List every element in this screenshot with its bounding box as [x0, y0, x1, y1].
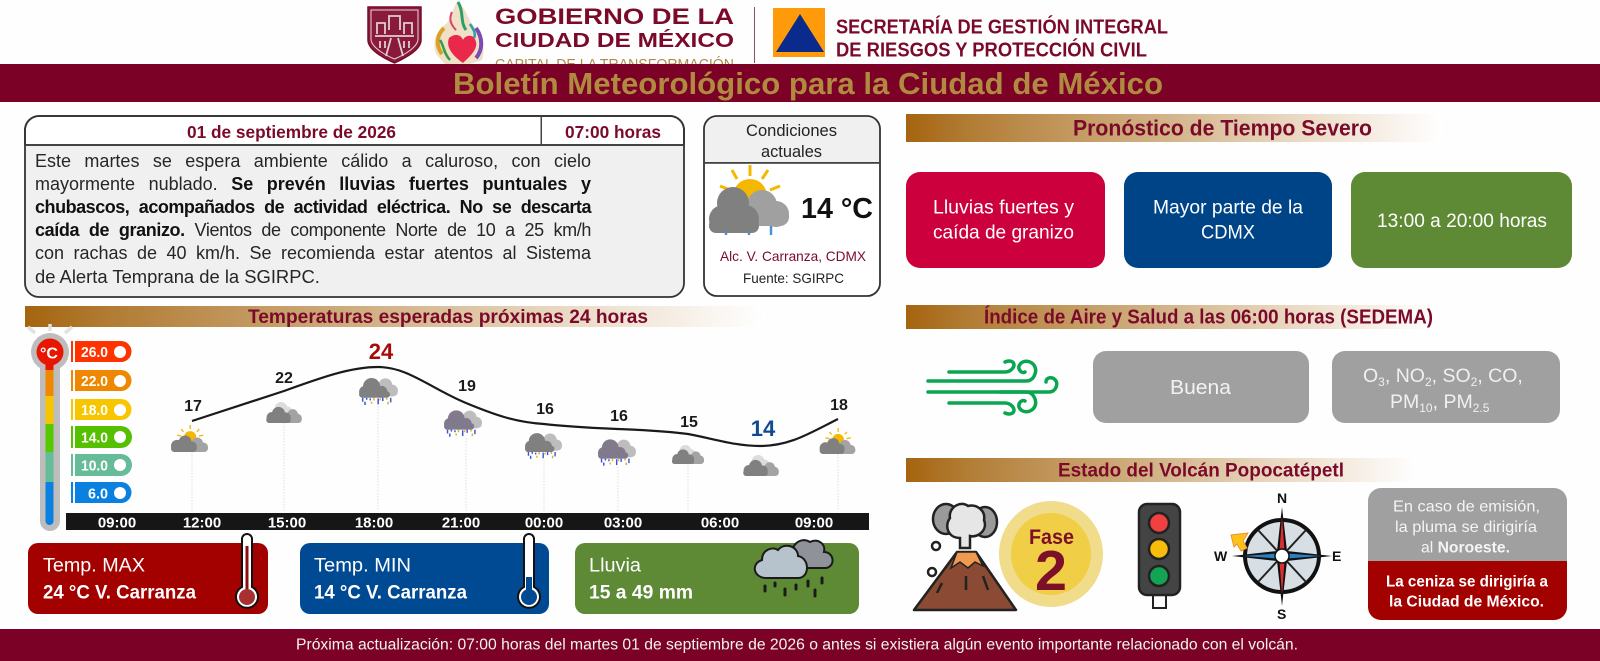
temperature scale labels: 14.0: [81, 430, 108, 446]
logo text: Gobierno de la Ciudad de México: GOBIERNO DE LA: [495, 4, 734, 29]
heading: [25, 306, 765, 328]
icon: compass: W: [1214, 548, 1228, 564]
card: pollutants: , PM: [1433, 391, 1473, 413]
logo text: Gobierno de la Ciudad de México: CIUDAD DE MÉXICO: [495, 29, 734, 52]
panel: volcano: [906, 458, 1567, 622]
card: max temperature: 24 °C V. Carranza: [43, 582, 196, 604]
heading: Estado del Volcán Popocatépetl: [1058, 460, 1344, 482]
footer band: [0, 629, 1600, 661]
temperature values: 17: [184, 398, 202, 415]
card: pollutants: PM: [1390, 391, 1419, 413]
card: pollutants: , NO: [1385, 365, 1425, 387]
hour axis: 06:00: [701, 514, 739, 532]
card: air quality rating: [1093, 351, 1309, 423]
card: plume direction: al Noroeste.: [1421, 540, 1510, 556]
temperature scale labels: 18.0: [81, 403, 108, 419]
card: pollutants: 10: [1419, 401, 1433, 415]
card: air quality rating: Buena: [1170, 376, 1232, 399]
icon: compass: [1214, 490, 1341, 622]
temperature scale labels: [71, 341, 132, 503]
icon: city shield: [368, 7, 421, 63]
card: rain: 15 a 49 mm: [589, 582, 693, 604]
forecast text: Este martes se espera ambiente cálido a caluroso, con cielo: [35, 151, 591, 171]
temperature scale labels: 10.0: [81, 458, 108, 474]
footer band: Próxima actualización: 07:00 horas del martes 01 de septiembre de 2026 o antes si existiera algún evento importante relacionado con el volcán.: [296, 636, 1298, 654]
heading: [906, 458, 1418, 482]
forecast text: mayormente nublado. Se prevén lluvias fuertes puntuales y: [35, 174, 591, 194]
forecast text: [35, 150, 595, 292]
title band: [0, 64, 1600, 102]
icon: compass: N: [1277, 490, 1287, 506]
hour axis: [66, 513, 869, 532]
logo text: Secretaría: [836, 14, 1168, 62]
icon: volcano: [914, 504, 1016, 610]
logo text: Gobierno de la Ciudad de México: [495, 4, 734, 73]
temperature scale labels: 6.0: [88, 486, 108, 502]
panel: daily forecast: [25, 116, 684, 297]
card: pollutants: O: [1363, 365, 1378, 387]
phase badge: [999, 501, 1103, 607]
icon: colorful heart emblem: [434, 1, 484, 64]
card: area: CDMX: [1201, 222, 1255, 244]
hour axis: 15:00: [268, 514, 306, 532]
forecast text: con rachas de 40 km/h. Se recomienda estar atentos al Sistema: [35, 243, 591, 263]
hour axis: 00:00: [525, 514, 563, 532]
temperature scale thermometer: [28, 324, 72, 531]
icon: thermometer high: [236, 534, 258, 608]
panel: current conditions: actuales: [761, 143, 822, 161]
card: max temperature: [28, 534, 268, 614]
panel: temperature forecast: [25, 306, 869, 532]
card: pollutants: , CO,: [1477, 365, 1523, 387]
panel: current conditions: [704, 116, 880, 296]
card: time window: [1351, 172, 1572, 268]
card: phenomenon: [906, 172, 1105, 268]
location: Alc. V. Carranza, CDMX: [720, 248, 867, 264]
icon: thermometer low: [518, 534, 540, 608]
icon: wind: [928, 361, 1057, 414]
logo text: Secretaría: DE RIESGOS Y PROTECCIÓN CIVIL: [836, 38, 1147, 62]
temperature values: 15: [680, 414, 698, 431]
heading: [906, 114, 1442, 142]
heading: Índice de Aire y Salud a las 06:00 horas (SEDEMA): [984, 306, 1433, 328]
phase badge: 2: [1035, 539, 1067, 603]
card: rain: Lluvia: [589, 554, 641, 576]
heading: Condiciones: [746, 122, 837, 140]
temperature values: [184, 339, 848, 441]
temperature values: 16: [610, 408, 628, 425]
card: min temperature: [300, 534, 549, 614]
temperature values: 22: [275, 370, 293, 387]
card: rain: [575, 540, 859, 614]
card: pollutants: 2: [1425, 375, 1432, 389]
card: plume direction: la Ciudad de México.: [1389, 594, 1544, 610]
card: max temperature: Temp. MAX: [43, 554, 145, 576]
temperature values: 24: [369, 339, 394, 364]
card: plume direction: La ceniza se dirigiría a: [1386, 574, 1548, 590]
icon: sun with rain clouds: [709, 165, 789, 235]
temperature values: 19: [458, 378, 476, 395]
logo text: Secretaría: SECRETARÍA DE GESTIÓN INTEGRAL: [836, 14, 1168, 38]
logo text: Gobierno de la Ciudad de México: CAPITAL DE LA TRANSFORMACIÓN: [495, 56, 734, 73]
forecast text: de Alerta Temprana de la SGIRPC.: [35, 266, 320, 287]
icon: traffic light: [1139, 504, 1180, 608]
card: area: [1124, 172, 1332, 268]
title band: Boletín Meteorológico para la Ciudad de México: [453, 66, 1163, 101]
card: phenomenon: caída de granizo: [933, 222, 1074, 244]
icon: civil protection: [773, 8, 825, 57]
hour axis: 21:00: [442, 514, 480, 532]
card: pollutants: , SO: [1432, 365, 1471, 387]
phase badge: Fase: [1029, 525, 1074, 549]
card: area: Mayor parte de la: [1153, 196, 1303, 218]
card: plume direction: la pluma se dirigiría: [1395, 519, 1537, 536]
date: 01 de septiembre de 2026: [187, 122, 396, 142]
card: min temperature: 14 °C V. Carranza: [314, 582, 467, 604]
icon: compass: S: [1277, 606, 1286, 622]
hour axis: 09:00: [795, 514, 833, 532]
card: plume direction: En caso de emisión,: [1393, 498, 1540, 516]
icon: rain clouds: [755, 540, 833, 596]
temperature values: 14: [751, 416, 776, 441]
chart: temperature line: [171, 339, 855, 511]
card: pollutants: 2: [1471, 375, 1478, 389]
time: 07:00 horas: [565, 122, 661, 142]
forecast text: chubascos, acompañados de actividad eléctrica. No se descarta: [35, 197, 591, 217]
current temperature: 14 °C: [801, 193, 873, 225]
weather icons: [171, 378, 855, 476]
card: pollutants: 2.5: [1473, 401, 1490, 415]
temperature scale labels: 26.0: [81, 345, 108, 361]
icon: compass: E: [1332, 548, 1341, 564]
panel: air quality: [906, 305, 1560, 423]
card: pollutants: [1332, 351, 1560, 423]
card: time window: 13:00 a 20:00 horas: [1377, 210, 1547, 232]
panel: severe weather: [906, 114, 1572, 268]
header logos: [368, 1, 1168, 73]
temperature values: 18: [830, 397, 848, 414]
temperature scale labels: 22.0: [81, 374, 108, 390]
card: phenomenon: Lluvias fuertes y: [933, 196, 1074, 218]
card: plume direction: [1368, 488, 1567, 620]
card: min temperature: Temp. MIN: [314, 554, 411, 576]
card: pollutants: 3: [1378, 375, 1385, 389]
heading: Temperaturas esperadas próximas 24 horas: [248, 306, 648, 328]
hour axis: 12:00: [183, 514, 221, 532]
hour axis: 18:00: [355, 514, 393, 532]
hour axis: 09:00: [98, 514, 136, 532]
temperature values: 16: [536, 401, 554, 418]
source: Fuente: SGIRPC: [743, 270, 844, 286]
heading: Pronóstico de Tiempo Severo: [1073, 116, 1372, 140]
forecast text: caída de granizo. Vientos de componente Norte de 10 a 25 km/h: [35, 220, 591, 240]
temperature scale thermometer: °C: [40, 346, 58, 362]
hour axis: 03:00: [604, 514, 642, 532]
